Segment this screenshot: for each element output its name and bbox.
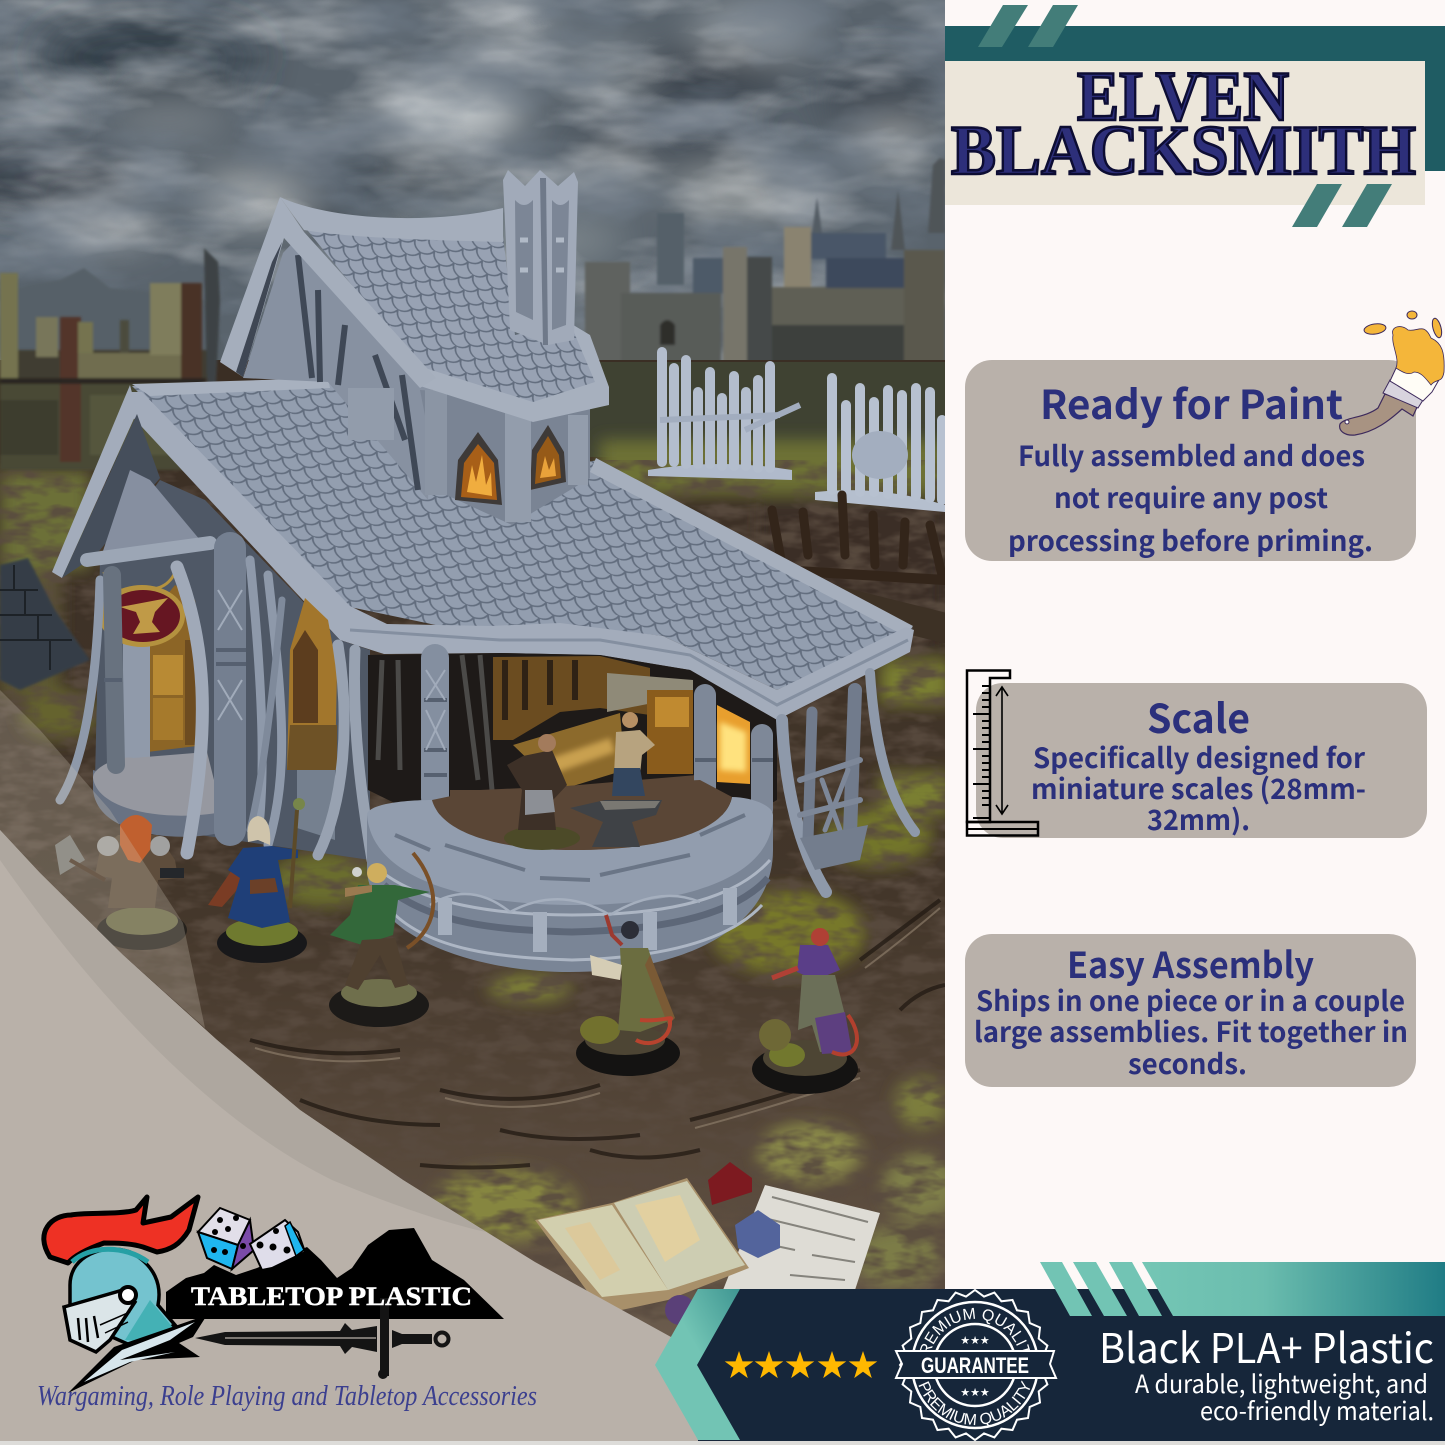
logo knight plume xyxy=(44,1197,198,1263)
guarantee badge: GUARANTEE xyxy=(921,1353,1029,1378)
rubble wall xyxy=(0,558,90,690)
miniature: wizard xyxy=(208,798,307,963)
top stripes xyxy=(978,5,1078,47)
material text: A durable, lightweight, and xyxy=(1135,1365,1428,1401)
material text xyxy=(1099,1315,1434,1428)
icon: ruler xyxy=(967,670,1038,836)
smiths and anvil inside the forge xyxy=(504,712,662,850)
body text: processing before priming. xyxy=(1008,520,1373,560)
body text xyxy=(1031,737,1366,839)
dormer xyxy=(420,390,590,525)
upper roof xyxy=(220,197,609,422)
walls behind struts xyxy=(95,480,370,860)
logo name: TABLETOP PLASTIC xyxy=(191,1282,472,1311)
title banner xyxy=(945,5,1445,227)
curved front platform xyxy=(367,780,773,972)
body text: not require any post xyxy=(1054,477,1328,517)
stormy sky xyxy=(0,0,945,380)
panel: ready for paint xyxy=(965,360,1416,561)
body text xyxy=(1008,435,1373,560)
top teal ribbon xyxy=(1142,1262,1445,1316)
logo knight helmet xyxy=(64,1249,207,1393)
miniature: purple robed xyxy=(752,928,858,1094)
distant mountain xyxy=(0,268,150,359)
miniature: elf archer xyxy=(329,853,433,1027)
body text: Ships in one piece or in a couple xyxy=(976,980,1405,1020)
left stone porch xyxy=(93,752,222,837)
open map book xyxy=(535,1178,749,1312)
translucent wash strip xyxy=(0,690,205,1028)
heading: Scale xyxy=(1147,687,1250,745)
title text: BLACKSMITH xyxy=(951,112,1416,190)
anvil sign xyxy=(102,572,185,647)
distant castle xyxy=(585,158,945,373)
main roof xyxy=(52,378,914,720)
back picket fences xyxy=(648,352,945,512)
beige curved panel xyxy=(0,830,700,1445)
open forge interior xyxy=(368,653,777,815)
guarantee badge: ★★★ xyxy=(960,1334,990,1347)
body text xyxy=(974,980,1408,1083)
dice xyxy=(708,1162,752,1205)
logo dice xyxy=(198,1208,305,1270)
heading: Easy Assembly xyxy=(1067,937,1314,989)
logo mountains xyxy=(166,1228,504,1319)
lattice and panels xyxy=(377,860,770,915)
body text: miniature scales (28mm- xyxy=(1031,768,1366,808)
logo sword xyxy=(195,1298,448,1379)
body text: Fully assembled and does xyxy=(1018,435,1365,475)
side window interior xyxy=(287,598,337,840)
logo tagline: Wargaming, Role Playing and Tabletop Accessories xyxy=(37,1380,537,1412)
material text: Black PLA+ Plastic xyxy=(1099,1315,1434,1375)
icon: paint brush xyxy=(1340,311,1444,435)
body text: seconds. xyxy=(1128,1043,1247,1083)
lit doorway xyxy=(123,585,196,758)
title text xyxy=(951,58,1416,190)
heading: Ready for Paint xyxy=(1040,373,1343,431)
navy band xyxy=(697,1289,1445,1441)
material text: eco-friendly material. xyxy=(1200,1392,1434,1428)
teal chevron xyxy=(655,1289,740,1440)
guarantee badge xyxy=(894,1289,1058,1441)
upper gable wall xyxy=(243,235,432,500)
dark curtains xyxy=(378,655,492,790)
character sheet xyxy=(723,1185,880,1290)
bottom stripes xyxy=(1292,184,1392,227)
miniature: dwarf xyxy=(55,815,187,950)
guarantee badge: ★★★ xyxy=(960,1386,990,1399)
bottom light strip xyxy=(0,1441,1445,1445)
panel: scale xyxy=(976,683,1427,839)
guarantee badge: PREMIUM QUALITY xyxy=(918,1380,1030,1426)
eave board xyxy=(128,392,914,720)
cream plate xyxy=(945,61,1425,205)
body text: 32mm). xyxy=(1147,799,1250,839)
broken wooden fence xyxy=(772,495,945,628)
guarantee badge: PREMIUM QUALITY xyxy=(920,1308,1030,1350)
diagonal stripes xyxy=(1040,1262,1162,1316)
rating stars xyxy=(725,1351,877,1378)
logo: Tabletop Plastic xyxy=(37,1197,537,1412)
miniature: tiefling with book xyxy=(576,915,680,1076)
title text: ELVEN xyxy=(1077,58,1289,136)
body text: Specifically designed for xyxy=(1033,737,1366,777)
tabletop props xyxy=(535,1162,880,1325)
ruined wall at left xyxy=(0,248,220,470)
right panel background xyxy=(945,0,1445,1289)
photo: elven blacksmith miniature scene xyxy=(0,0,959,1340)
body text: large assemblies. Fit together in xyxy=(974,1011,1408,1051)
building: elven smithy xyxy=(52,170,915,972)
teal frame xyxy=(945,26,1445,171)
front gable board xyxy=(52,385,137,578)
support columns and struts xyxy=(60,543,915,892)
panel: easy assembly xyxy=(965,934,1416,1087)
ground: mud and grass xyxy=(0,360,959,1340)
chimney xyxy=(503,170,578,345)
footer band xyxy=(655,1262,1445,1441)
